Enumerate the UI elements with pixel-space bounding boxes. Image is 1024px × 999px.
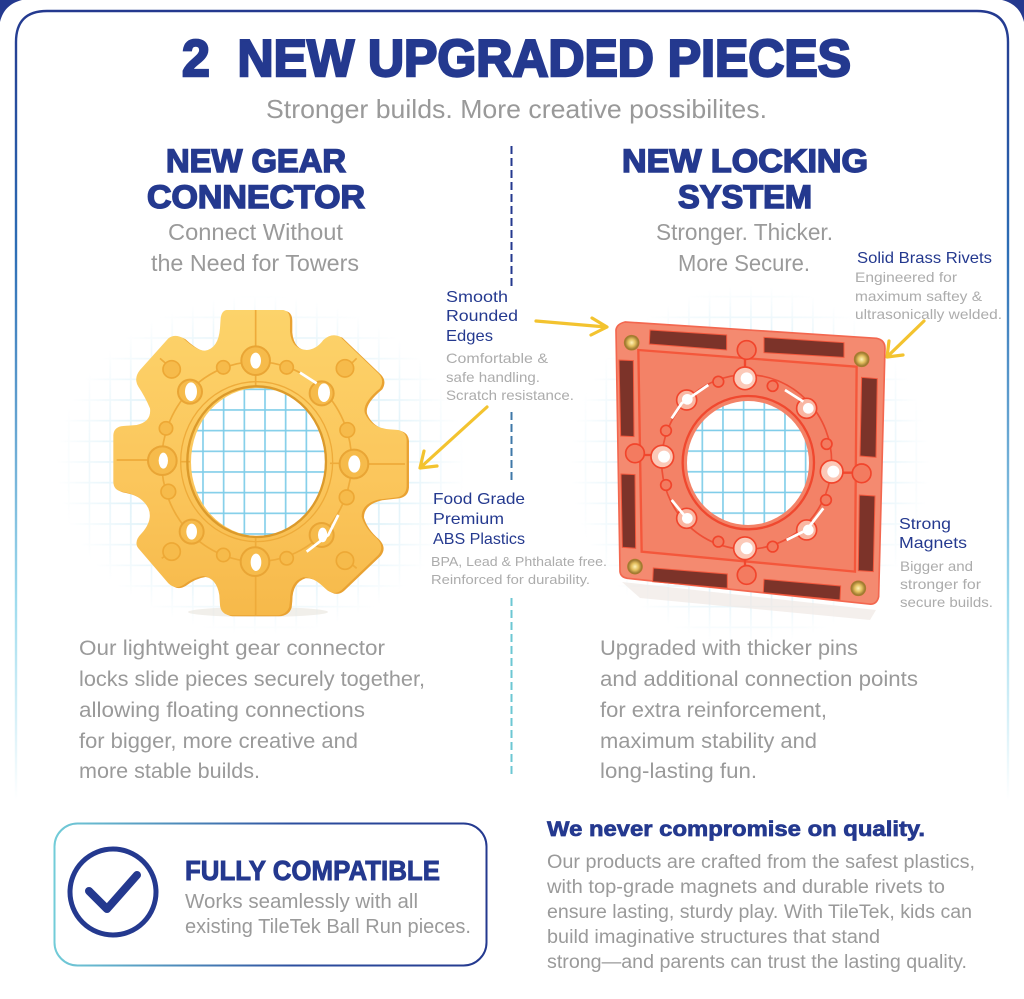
arrow: food grade plastics: [420, 407, 487, 468]
gear connector description: locks slide pieces securely together,: [79, 668, 425, 691]
callout: smooth rounded edges: [446, 289, 574, 403]
locking system tagline: More Secure.: [678, 250, 810, 276]
gear connector tagline: the Need for Towers: [151, 250, 359, 276]
gear connector product: [113, 310, 409, 617]
callout: strong magnets: secure builds.: [900, 594, 993, 610]
locking system description: [600, 637, 918, 783]
subtitle: Stronger builds. More creative possibilites.: [266, 94, 767, 124]
locking system description: long-lasting fun.: [600, 760, 757, 783]
dashed centre divider: [510, 146, 512, 775]
locking tile product: [616, 322, 885, 620]
gear connector description: allowing floating connections: [79, 699, 365, 722]
callout: food grade plastics: [431, 491, 607, 587]
callout: solid brass rivets: [855, 250, 1002, 322]
quality text: build imaginative structures that stand: [547, 927, 880, 948]
quality heading: We never compromise on quality.: [547, 818, 925, 841]
gear body: [113, 310, 409, 616]
heading: new gear connector: NEW GEAR: [166, 143, 346, 179]
locking system tagline: Stronger. Thicker.: [656, 219, 833, 245]
gear connector description: for bigger, more creative and: [79, 730, 358, 753]
background grid: [74, 300, 914, 630]
panel: fully compatible: [54, 824, 486, 966]
heading: new gear connector: CONNECTOR: [147, 179, 365, 215]
gear connector description: Our lightweight gear connector: [79, 637, 385, 660]
gear shadow: [188, 607, 328, 617]
heading: new locking system: SYSTEM: [678, 179, 812, 215]
icon: check mark: [70, 849, 156, 935]
locking system description: maximum stability and: [600, 730, 817, 753]
callout: strong magnets: Bigger and: [900, 558, 973, 574]
callout: solid brass rivets: Solid Brass Rivets: [857, 250, 992, 267]
arrow: brass rivets: [887, 321, 924, 357]
callout: smooth rounded edges: safe handling.: [446, 369, 540, 385]
tile body: [616, 322, 885, 604]
callout: smooth rounded edges: Comfortable &: [446, 350, 549, 366]
quality text: with top-grade magnets and durable rivets to: [546, 877, 945, 898]
tile grid through hole: [686, 400, 810, 526]
tile details: [619, 330, 877, 600]
locking system tagline: [656, 219, 833, 276]
callout: strong magnets: Strong: [899, 516, 951, 533]
callout: solid brass rivets: Engineered for: [855, 269, 957, 285]
brass rivets: [624, 335, 869, 596]
heading: new gear connector: [147, 143, 365, 215]
heading: new locking system: [622, 143, 868, 215]
callout: strong magnets: [899, 516, 993, 610]
callout: solid brass rivets: maximum saftey &: [855, 288, 983, 304]
compatible text: [185, 891, 471, 938]
callout: food grade plastics: Reinforced for durability.: [431, 572, 590, 587]
callout: smooth rounded edges: Scratch resistance.: [446, 387, 574, 403]
gear connector description: more stable builds.: [79, 760, 260, 783]
callout: strong magnets: Magnets: [899, 535, 967, 552]
title: 2 NEW UPGRADED PIECES: [182, 30, 851, 88]
compatible text: existing TileTek Ball Run pieces.: [185, 916, 471, 938]
callout: solid brass rivets: ultrasonically welded.: [855, 306, 1002, 322]
locking system description: Upgraded with thicker pins: [600, 637, 858, 660]
gear moulded details: [117, 310, 405, 615]
callout: food grade plastics: Premium: [433, 511, 504, 528]
callout: smooth rounded edges: Smooth: [446, 289, 508, 306]
callout: smooth rounded edges: Rounded: [446, 308, 518, 325]
locking system description: and additional connection points: [600, 668, 918, 691]
callout: food grade plastics: Food Grade: [433, 491, 525, 508]
callout: food grade plastics: BPA, Lead & Phthalate free.: [431, 554, 607, 569]
callout: food grade plastics: ABS Plastics: [433, 531, 525, 548]
gear connector tagline: Connect Without: [168, 219, 344, 245]
locking system description: for extra reinforcement,: [600, 699, 827, 722]
compatible heading: FULLY COMPATIBLE: [185, 855, 440, 886]
quality text: strong—and parents can trust the lasting quality.: [547, 952, 967, 973]
tile shadow: [622, 582, 876, 620]
quality text: [546, 852, 975, 973]
gear connector tagline: [151, 219, 359, 276]
heading: new locking system: NEW LOCKING: [622, 143, 868, 179]
quality text: Our products are crafted from the safest plastics,: [547, 852, 975, 873]
quality text: ensure lasting, sturdy play. With TileTek, kids can: [547, 902, 972, 923]
arrow: smooth rounded edges: [536, 318, 607, 335]
compatible text: Works seamlessly with all: [185, 891, 418, 913]
callout: smooth rounded edges: Edges: [446, 328, 493, 345]
callout: strong magnets: stronger for: [900, 576, 981, 592]
gear grid through hole: [190, 387, 326, 537]
gear connector description: [79, 637, 425, 783]
